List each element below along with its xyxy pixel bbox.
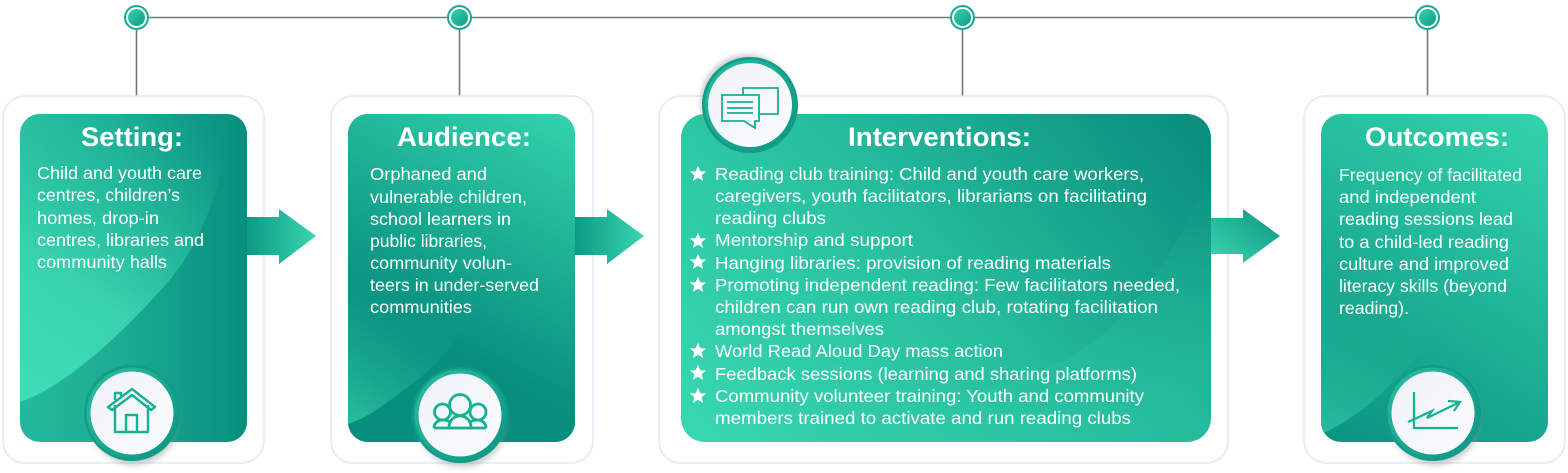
timeline node: outcomes	[1416, 6, 1439, 29]
text: audience description: vulnerable children,	[370, 187, 527, 207]
text: setting description: community halls	[37, 252, 167, 272]
heading: interventions: Interventions:	[848, 122, 1031, 152]
list: interventions: Promoting independent reading: Few facilitators needed,	[715, 275, 1180, 295]
heading: outcomes: Outcomes:	[1365, 122, 1509, 152]
text: setting description: homes, drop-in	[37, 208, 159, 228]
timeline node: setting	[125, 6, 148, 29]
icon: people group	[412, 367, 508, 467]
text: audience description: public libraries,	[370, 231, 487, 251]
list: interventions: World Read Aloud Day mass action	[715, 341, 1003, 361]
text: outcomes description: literacy skills (beyond	[1339, 276, 1507, 296]
icon: house	[84, 365, 180, 465]
text: audience description: community volun-	[370, 253, 512, 273]
text: outcomes description: culture and improved	[1339, 254, 1509, 274]
text: outcomes description: and independent	[1339, 187, 1476, 207]
text: outcomes description: Frequency of facilitated	[1339, 165, 1522, 185]
text: audience description: teers in under-served	[370, 275, 539, 295]
list stars	[690, 166, 706, 403]
icon: chat bubbles	[701, 55, 798, 153]
arrow: setting to audience	[247, 209, 316, 264]
text: audience description: Orphaned and	[370, 164, 487, 184]
text: audience description: communities	[370, 297, 472, 317]
text: outcomes description	[1339, 165, 1522, 318]
heading: setting: Setting:	[81, 122, 183, 152]
text: setting description: Child and youth care	[37, 163, 202, 183]
text: setting description: centres, libraries and	[37, 230, 204, 250]
timeline node: interventions	[951, 6, 974, 29]
text: setting description: centres, children’s	[37, 185, 180, 205]
timeline node: audience	[448, 6, 471, 29]
icon: growth chart	[1385, 365, 1481, 465]
list: interventions: reading clubs	[715, 208, 826, 228]
list: interventions: children can run own reading club, rotating facilitation	[715, 297, 1158, 317]
arrow: audience to interventions	[575, 209, 644, 264]
text: outcomes description: reading).	[1339, 298, 1409, 318]
list: interventions: Feedback sessions (learning and sharing platforms)	[715, 364, 1137, 384]
list: interventions: members trained to activate and run reading clubs	[715, 408, 1131, 428]
list: interventions: Mentorship and support	[715, 230, 913, 250]
panel: audience	[331, 96, 593, 463]
text: outcomes description: reading sessions lead	[1339, 209, 1513, 229]
panel: interventions	[659, 96, 1228, 463]
panel: setting	[3, 96, 264, 463]
text: outcomes description: to a child-led reading	[1339, 232, 1509, 252]
text: audience description: school learners in	[370, 209, 511, 229]
list: interventions: Hanging libraries: provision of reading materials	[715, 253, 1111, 273]
list: interventions: amongst themselves	[715, 319, 884, 339]
list: interventions: Reading club training: Child and youth care workers,	[715, 164, 1144, 184]
arrow: interventions to outcomes	[1211, 209, 1280, 263]
list: interventions	[690, 164, 1180, 428]
heading: audience: Audience:	[397, 122, 531, 152]
text: audience description	[370, 164, 539, 317]
text: setting description	[37, 163, 204, 272]
list: interventions: Community volunteer training: Youth and community	[715, 386, 1144, 406]
list: interventions: caregivers, youth facilitators, librarians on facilitating	[715, 186, 1147, 206]
timeline connector	[136, 18, 1428, 96]
panel: outcomes	[1304, 96, 1565, 463]
